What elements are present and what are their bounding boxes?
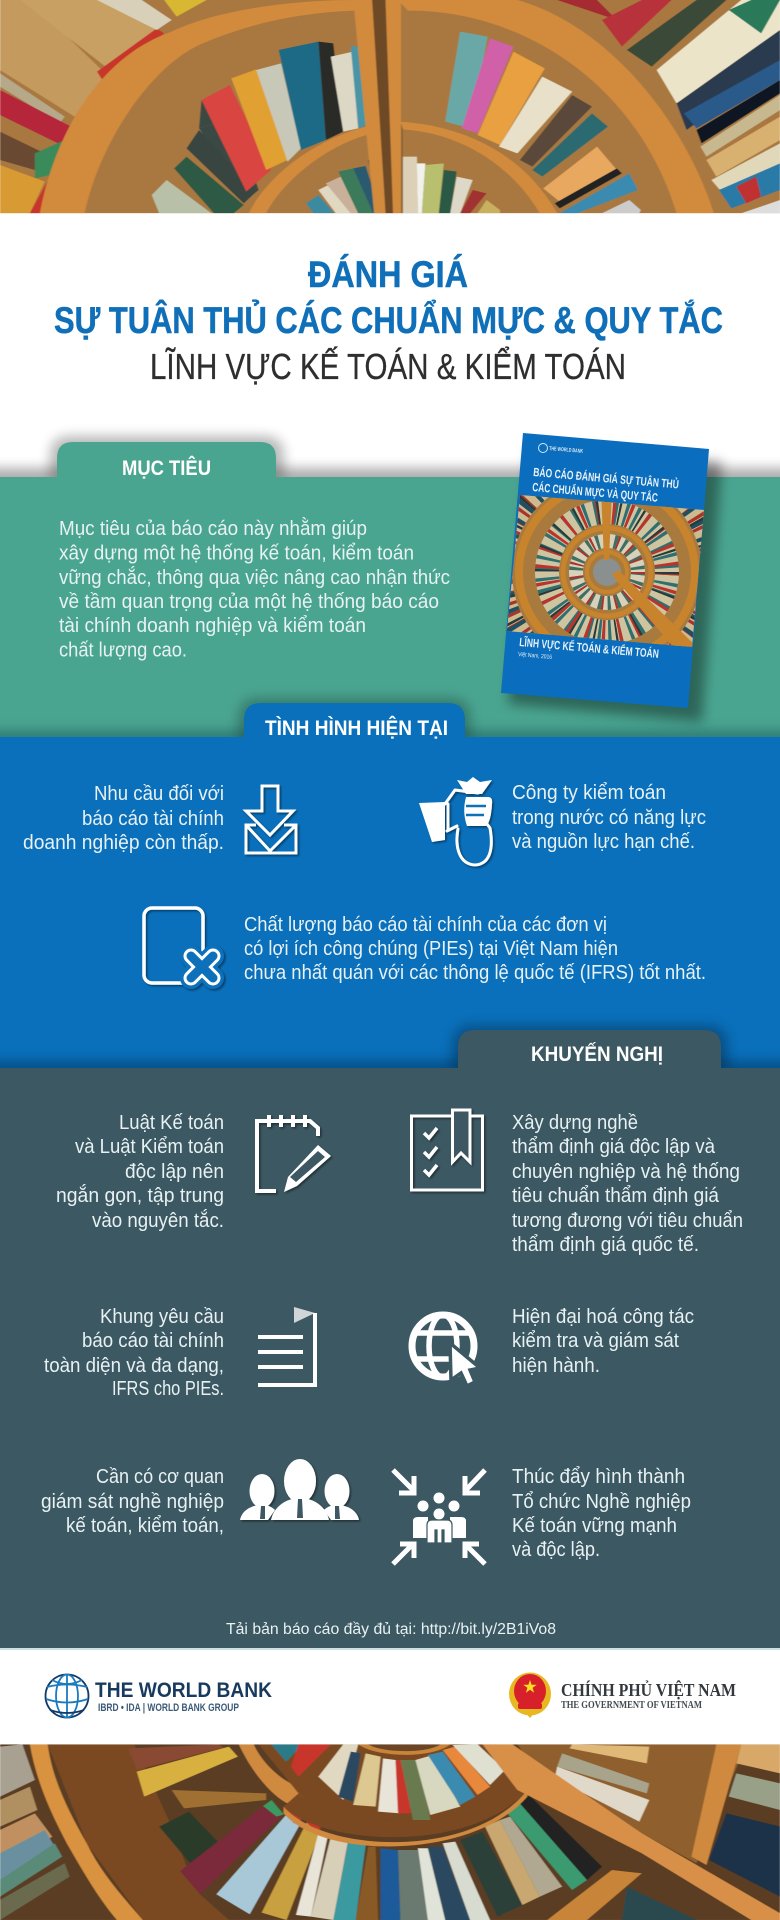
text: professional organisation: và độc lập. xyxy=(512,1539,600,1561)
text: demand xyxy=(23,783,224,854)
cover photo xyxy=(507,495,704,647)
text: valuation profession xyxy=(512,1112,743,1256)
logo: the world bank: IBRD • IDA | WORLD BANK GROUP xyxy=(98,1702,239,1714)
icon: checklist with bookmark xyxy=(412,1110,482,1190)
photo: bookshelf header xyxy=(0,0,780,213)
text: modernize inspection: kiểm tra và giám sát xyxy=(512,1330,679,1352)
logo: government of vietnam xyxy=(509,1672,736,1718)
text: professional organisation: Kế toán vững mạnh xyxy=(512,1515,677,1537)
cover logo xyxy=(538,444,583,455)
text: report quality: có lợi ích công chúng (PIEs) tại Việt Nam hiện xyxy=(244,938,618,960)
icon: document with x xyxy=(144,908,213,983)
globe xyxy=(46,1674,88,1718)
icon: group with converging arrows xyxy=(393,1470,485,1564)
text: professional organisation xyxy=(512,1466,691,1561)
text: reporting framework: toàn diện và đa dạng, xyxy=(44,1355,224,1377)
icon: notepad and pencil xyxy=(257,1115,331,1192)
panel: mục tiêu xyxy=(0,436,780,739)
emblem xyxy=(509,1672,551,1718)
text: report quality xyxy=(244,914,706,984)
text: supervisory body: giám sát nghề nghiệp xyxy=(41,1491,224,1513)
text: reporting framework: Khung yêu cầu xyxy=(100,1306,224,1328)
text: accounting law xyxy=(56,1112,224,1232)
panel: khuyến nghị xyxy=(0,1025,780,1648)
text block: objective: xây dựng một hệ thống kế toán, kiểm toán xyxy=(59,542,414,564)
heading: khuyến nghị: KHUYẾN NGHỊ xyxy=(531,1043,663,1066)
icon: hand with money bag xyxy=(419,777,492,865)
heading: tình hình hiện tại: TÌNH HÌNH HIỆN TẠI xyxy=(265,716,448,740)
cover title xyxy=(532,464,679,505)
text: accounting law: vào nguyên tắc. xyxy=(92,1209,224,1232)
text: accounting law: Luật Kế toán xyxy=(119,1112,224,1134)
text: professional organisation: Tổ chức Nghề nghiệp xyxy=(512,1491,691,1513)
cover subtitle xyxy=(518,634,660,661)
title xyxy=(54,254,723,387)
text: professional organisation: Thúc đẩy hình thành xyxy=(512,1466,685,1488)
download link text: Tải bản báo cáo đầy đủ tại: http://bit.ly/2B1iVo8 xyxy=(226,1621,556,1638)
cover subtitle: Việt Nam, 2016 xyxy=(518,652,553,661)
text: valuation profession: tiêu chuẩn thẩm định giá xyxy=(512,1185,720,1207)
text: audit firms: Công ty kiểm toán xyxy=(512,782,666,804)
text: modernize inspection xyxy=(512,1306,694,1377)
panel: tình hình hiện tại xyxy=(0,698,780,1070)
icon: download arrow xyxy=(246,786,296,853)
tab: khuyến nghị xyxy=(458,1030,721,1069)
title line 1: ĐÁNH GIÁ xyxy=(308,254,468,295)
text: valuation profession: Xây dựng nghề xyxy=(512,1112,638,1134)
cover subtitle: LĨNH VỰC KẾ TOÁN & KIỂM TOÁN xyxy=(519,634,660,661)
text: modernize inspection: Hiện đại hoá công tác xyxy=(512,1306,694,1328)
photo: bookshelf footer xyxy=(0,1744,780,1920)
icon: globe with cursor xyxy=(412,1315,480,1386)
logo: government of vietnam: CHÍNH PHỦ VIỆT NAM xyxy=(561,1679,736,1700)
text: valuation profession: tương đương với tiêu chuẩn xyxy=(512,1210,743,1232)
logo: the world bank: THE WORLD BANK xyxy=(95,1679,272,1702)
text: report quality: Chất lượng báo cáo tài chính của các đơn vị xyxy=(244,914,607,936)
title line 3: LĨNH VỰC KẾ TOÁN & KIỂM TOÁN xyxy=(150,345,626,387)
report cover xyxy=(482,433,732,722)
text block: objective: chất lượng cao. xyxy=(59,640,187,662)
text: demand: doanh nghiệp còn thấp. xyxy=(23,832,224,854)
text: reporting framework: IFRS cho PIEs. xyxy=(112,1378,224,1400)
text block: objective: vững chắc, thông qua việc nâng cao nhận thức xyxy=(59,566,450,589)
text block: objective: về tầm quan trọng của một hệ thống báo cáo xyxy=(59,591,439,613)
text: accounting law: và Luật Kiểm toán xyxy=(75,1136,224,1158)
text: supervisory body: kế toán, kiểm toán, xyxy=(66,1515,224,1537)
cover logo: THE WORLD BANK xyxy=(549,446,583,455)
text block: objective: Mục tiêu của báo cáo này nhằm giúp xyxy=(59,517,367,540)
logo: government of vietnam: THE GOVERNMENT OF VIETNAM xyxy=(561,1700,702,1711)
text: accounting law: độc lập nên xyxy=(125,1161,224,1183)
text: modernize inspection: hiện hành. xyxy=(512,1355,600,1377)
text block: objective xyxy=(59,517,450,662)
text: audit firms: và nguồn lực hạn chế. xyxy=(512,831,695,853)
text: demand: Nhu cầu đối với xyxy=(94,783,224,805)
text: valuation profession: thẩm định giá độc lập và xyxy=(512,1136,716,1158)
text: valuation profession: chuyên nghiệp và hệ thống xyxy=(512,1161,740,1183)
heading: mục tiêu: MỤC TIÊU xyxy=(122,456,211,480)
text block: objective: tài chính doanh nghiệp và kiểm toán xyxy=(59,615,366,637)
text: audit firms xyxy=(512,782,706,853)
text: audit firms: trong nước có năng lực xyxy=(512,807,706,829)
cover title: BÁO CÁO ĐÁNH GIÁ SỰ TUÂN THỦ xyxy=(533,464,679,491)
text: reporting framework xyxy=(44,1306,224,1400)
text: accounting law: ngắn gọn, tập trung xyxy=(56,1184,224,1207)
icon: three people xyxy=(240,1459,359,1520)
text: valuation profession: thẩm định giá quốc tế. xyxy=(512,1234,699,1256)
text: supervisory body: Cần có cơ quan xyxy=(96,1466,224,1488)
text: report quality: chưa nhất quán với các thông lệ quốc tế (IFRS) tốt nhất. xyxy=(244,962,706,984)
text: supervisory body xyxy=(41,1466,224,1537)
tab: mục tiêu xyxy=(57,442,276,478)
text: demand: báo cáo tài chính xyxy=(82,808,224,830)
text: reporting framework: báo cáo tài chính xyxy=(82,1330,224,1352)
cover title: CÁC CHUẨN MỰC VÀ QUY TẮC xyxy=(532,479,659,505)
logo: the world bank xyxy=(46,1674,272,1718)
icon: document lines xyxy=(258,1307,315,1385)
tab: tình hình xyxy=(244,703,465,738)
